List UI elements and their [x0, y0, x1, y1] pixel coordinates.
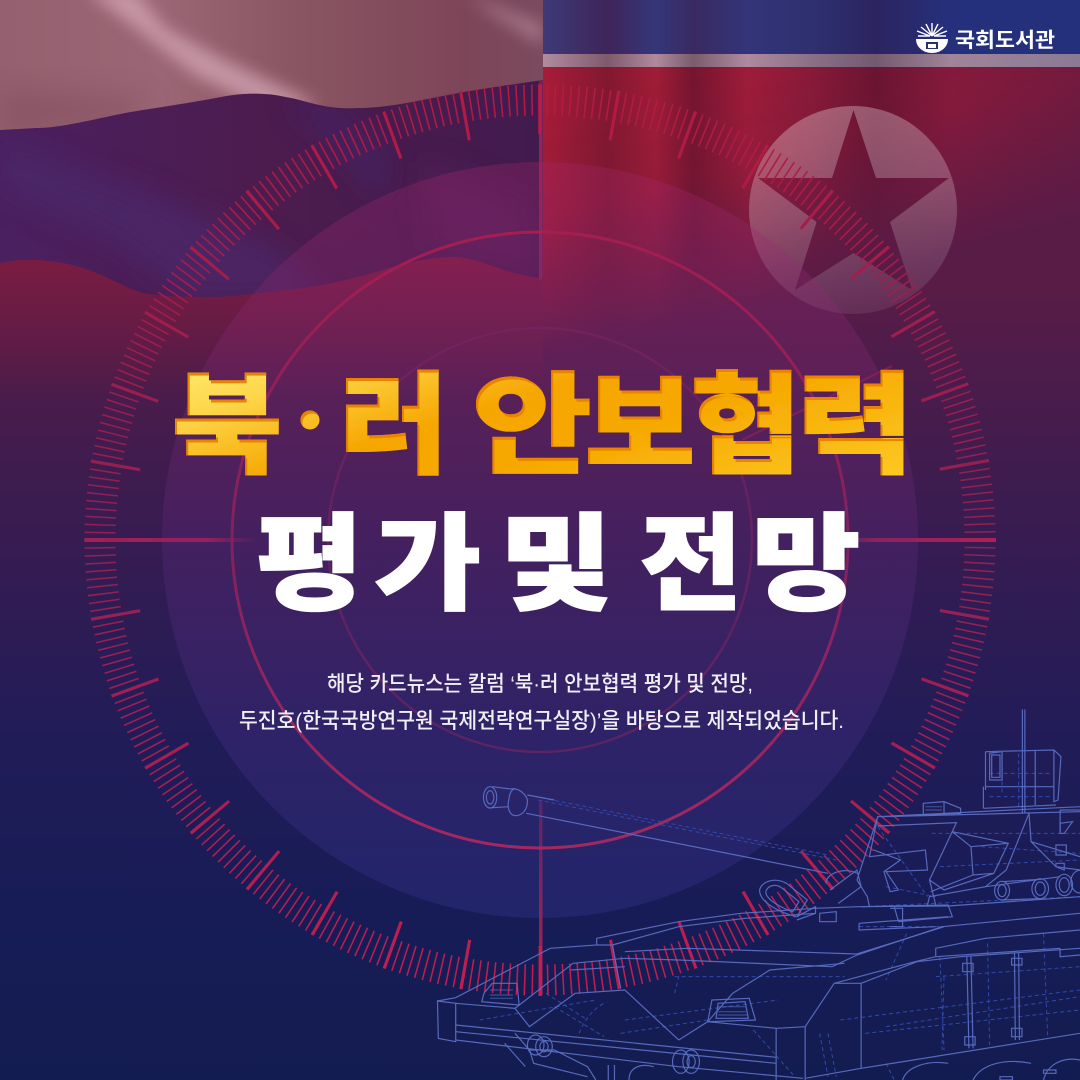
logo: National Assembly Library [916, 23, 1055, 53]
tank solid wireframe [437, 709, 1080, 1080]
title line 1: 북·러 안보협력: 력 [797, 365, 914, 488]
title line 1: 북·러 안보협력: 협 [691, 365, 801, 488]
panel: Russian flag [0, 0, 543, 405]
radar rings [232, 232, 892, 848]
logo wordmark: 국회도서관 [955, 29, 1055, 52]
panel: North Korean flag [543, 0, 1080, 336]
tank turret [826, 807, 1080, 907]
description text: 두진호(한국국방연구원 국제전략연구실장)’을 바탕으로 제작되었습니다. [239, 709, 844, 733]
tank gun barrel [483, 787, 828, 873]
icon: open book with rays [916, 23, 948, 53]
title line 1: 북·러 안보협력 [172, 365, 914, 488]
tank wheels on turret [985, 870, 1080, 900]
title line 2: 평가 및 전망: 망 [752, 507, 860, 624]
title line 1: 북·러 안보협력: 보 [585, 365, 695, 488]
title line 2: 평가 및 전망: 전 [640, 507, 742, 624]
illustration: wireframe tank [437, 709, 1080, 1080]
title line 1: 북·러 안보협력: 러 [340, 365, 448, 488]
tank hidden dashed lines [480, 753, 1080, 1080]
description text [239, 672, 844, 733]
radar disc [162, 162, 918, 918]
tank hatches [482, 983, 755, 1022]
tank commander sight [983, 709, 1061, 813]
title line 2: 평가 및 전망: 평 [256, 507, 363, 624]
tank side skirt bolts [963, 953, 1022, 1048]
title line 2: 평가 및 전망: 가 [374, 507, 480, 624]
tank lower wheels [505, 1033, 1080, 1080]
radar tick marks [100, 100, 980, 980]
crosshair lines [85, 85, 996, 995]
description text: 해당 카드뉴스는 칼럼 ‘북·러 안보협력 평가 및 전망, [327, 672, 753, 696]
tank mantlet [760, 880, 807, 917]
title line 2: 평가 및 전망: 및 [500, 507, 612, 624]
tank smoke launcher [923, 802, 961, 815]
title line 1: 북·러 안보협력: 안 [472, 365, 592, 488]
tank hull top [437, 897, 1080, 1001]
icon: North Korean star emblem [749, 106, 957, 314]
title line 2: 평가 및 전망 [256, 507, 860, 624]
title line 1: 북·러 안보협력: 북 [172, 365, 282, 488]
